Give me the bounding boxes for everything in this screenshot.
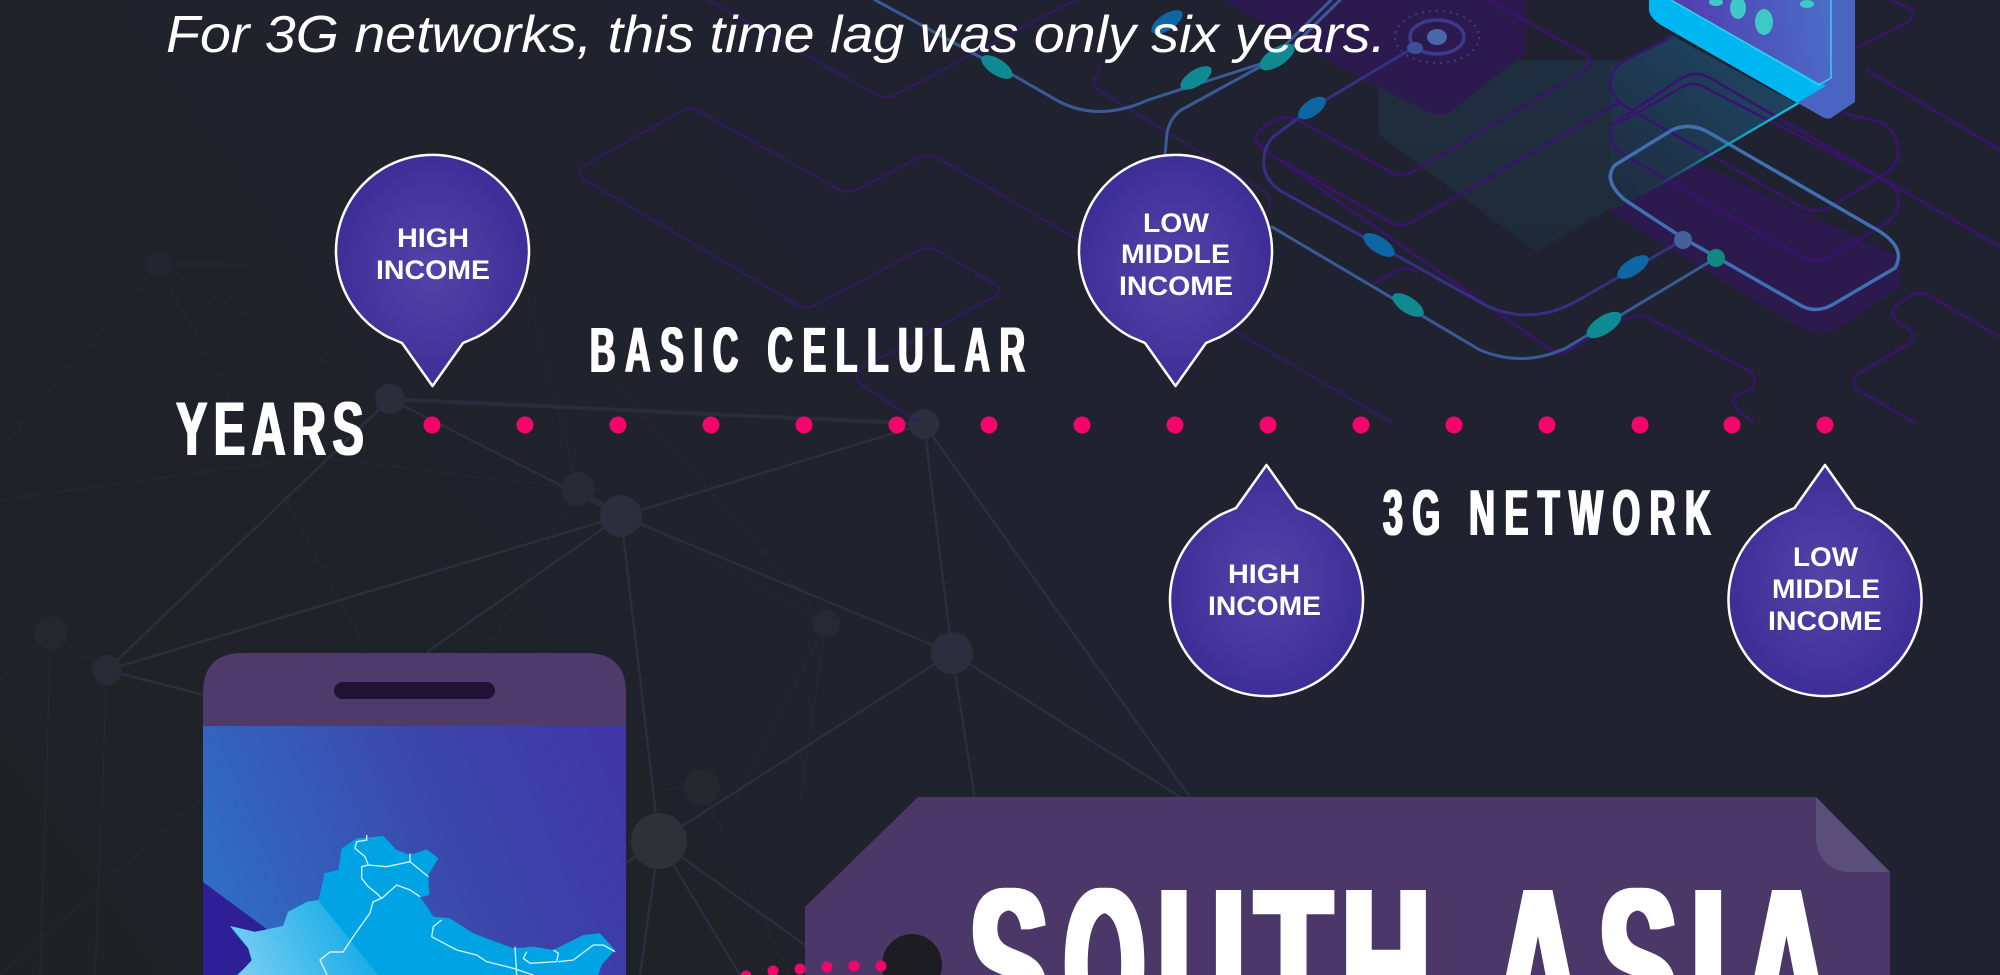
pin: 3G low middle income: LOW xyxy=(1793,542,1859,572)
pin: 3G high income xyxy=(1170,465,1363,696)
heading text: For 3G networks, this time lag was only six years. xyxy=(166,6,1386,64)
pin: 3G high income: INCOME xyxy=(1208,591,1321,621)
pin: 3G low middle income: INCOME xyxy=(1768,606,1882,636)
pin: basic cellular high income: INCOME xyxy=(376,255,490,285)
tablet device xyxy=(1649,0,1855,119)
pin: basic cellular high income xyxy=(336,155,529,386)
tag title xyxy=(972,888,1818,975)
thin purple traces xyxy=(580,0,1392,423)
south asia map xyxy=(230,835,615,975)
phone with South Asia map xyxy=(203,653,626,975)
pin: basic cellular low middle income: INCOME xyxy=(1119,271,1233,301)
label: years: YEARS xyxy=(176,388,364,472)
label: 3G network: 3G NETWORK xyxy=(1383,478,1711,550)
pin: basic cellular low middle income: LOW xyxy=(1143,208,1210,238)
phone header xyxy=(203,653,626,726)
phone speaker xyxy=(334,682,495,699)
dots xyxy=(424,416,1834,434)
map light area xyxy=(230,900,378,975)
network nodes xyxy=(34,251,973,869)
pin: 3G low middle income xyxy=(1728,465,1921,696)
tag fold xyxy=(1816,797,1890,872)
circuit board illustration xyxy=(580,0,2000,423)
pin: basic cellular high income: HIGH xyxy=(397,223,469,253)
pin: 3G high income: HIGH xyxy=(1228,559,1300,589)
blue traces xyxy=(1264,48,1683,315)
connector dots from phone to tag xyxy=(740,960,886,975)
dark blocks xyxy=(1223,0,1900,333)
label: basic cellular: BASIC CELLULAR xyxy=(590,314,1025,386)
circuit connector nodes xyxy=(978,5,1725,343)
tag: South Asia xyxy=(805,797,1890,975)
network mesh background xyxy=(0,264,1192,975)
map border line xyxy=(320,898,382,975)
tag hole xyxy=(882,934,942,975)
circuit ring node xyxy=(1395,11,1479,63)
timeline: years label and dots xyxy=(176,388,1834,472)
pin: basic cellular low middle income: MIDDLE xyxy=(1121,239,1230,269)
phone screen xyxy=(203,726,626,975)
pin: 3G low middle income: MIDDLE xyxy=(1772,574,1880,604)
pin: basic cellular low middle income xyxy=(1079,155,1272,386)
